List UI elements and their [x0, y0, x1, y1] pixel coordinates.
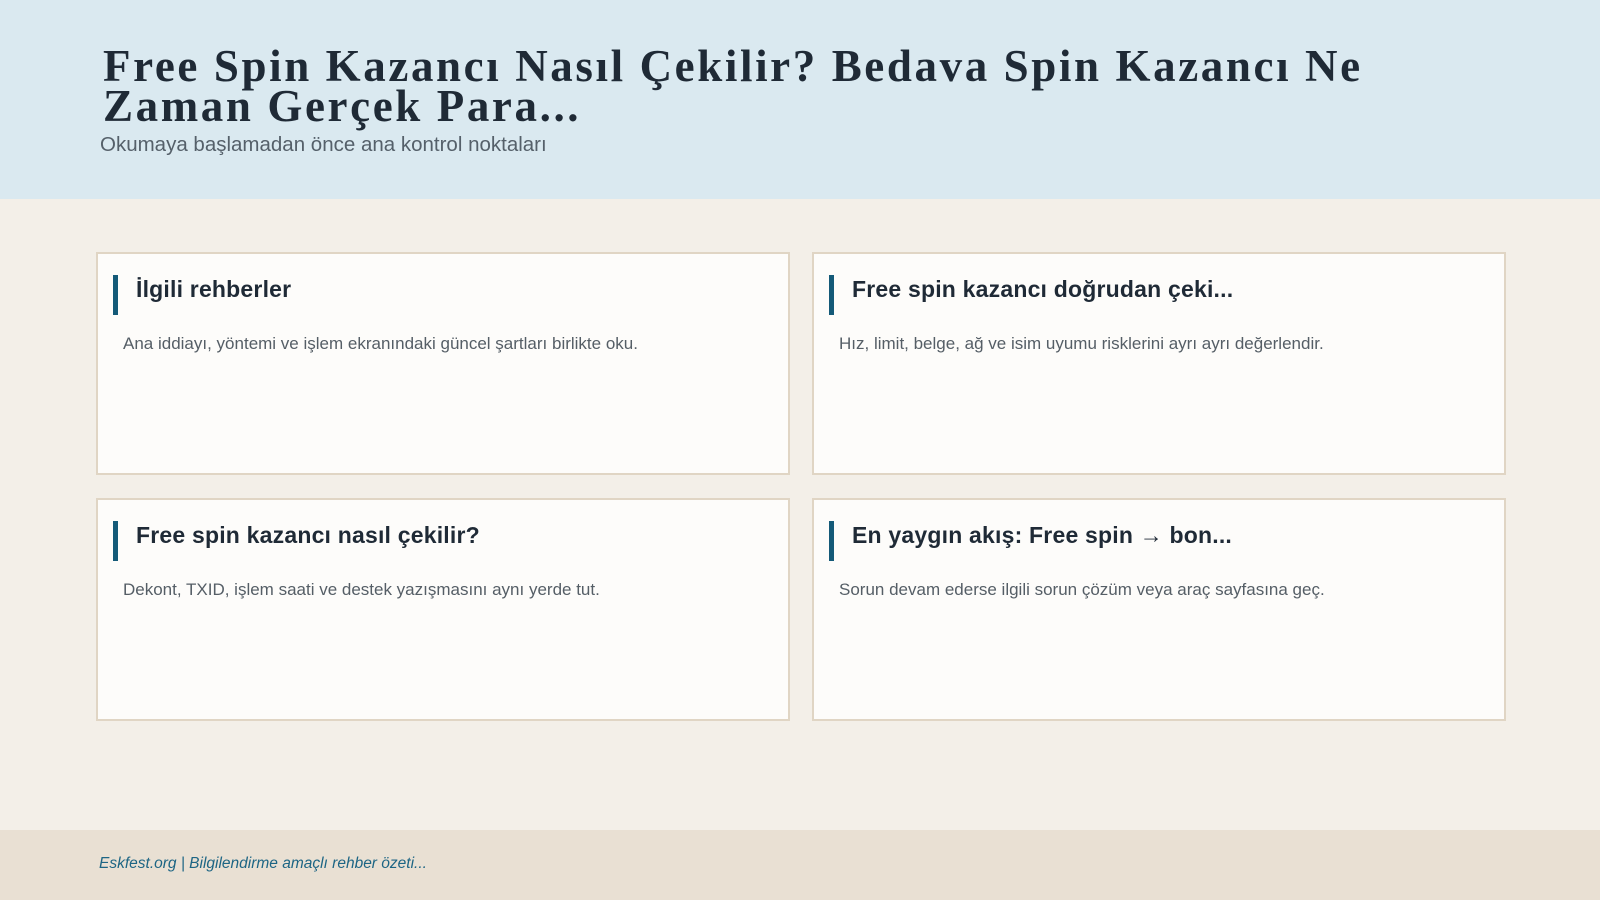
- accent bar: [113, 275, 118, 315]
- accent bar: [829, 275, 834, 315]
- card text: Ana iddiayı, yöntemi ve işlem ekranındaki güncel şartları birlikte oku.: [123, 334, 638, 353]
- card heading: İlgili rehberler: [136, 276, 291, 302]
- header band: [0, 0, 1600, 199]
- accent bar: [829, 521, 834, 561]
- card heading: Free spin kazancı nasıl çekilir?: [136, 522, 480, 548]
- panel: ilgili rehberler: [96, 252, 790, 475]
- title: Zaman Gerçek Para...: [103, 81, 581, 131]
- card text: Dekont, TXID, işlem saati ve destek yazışmasını aynı yerde tut.: [123, 580, 600, 599]
- card heading: Free spin kazancı doğrudan çeki...: [852, 276, 1233, 302]
- card text: Hız, limit, belge, ağ ve isim uyumu risklerini ayrı ayrı değerlendir.: [839, 334, 1324, 353]
- footer: Eskfest.org | Bilgilendirme amaçlı rehber özeti...: [99, 855, 427, 872]
- accent bar: [113, 521, 118, 561]
- card text: Sorun devam ederse ilgili sorun çözüm veya araç sayfasına geç.: [839, 580, 1325, 599]
- subtitle: Okumaya başlamadan önce ana kontrol noktaları: [100, 133, 547, 156]
- footer: [0, 830, 1600, 900]
- title: Free Spin Kazancı Nasıl Çekilir? Bedava Spin Kazancı Ne: [103, 41, 1363, 91]
- title: [103, 41, 1363, 131]
- panel: nasıl çekilir: [96, 498, 790, 721]
- card heading: En yaygın akış: Free spin → bon...: [852, 522, 1232, 548]
- panel: doğrudan çekim: [812, 252, 1506, 475]
- panel: yaygın akış: [812, 498, 1506, 721]
